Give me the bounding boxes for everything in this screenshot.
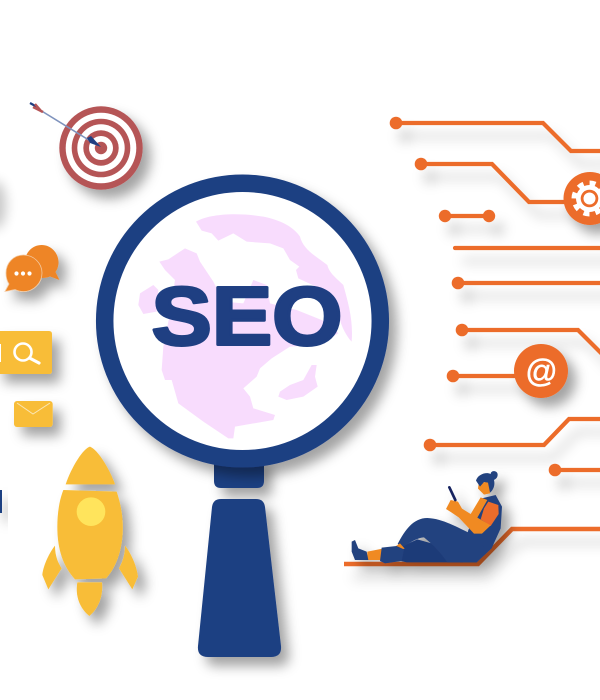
magnifying glass <box>105 183 380 657</box>
face <box>478 481 491 495</box>
circuit line 7 <box>447 370 520 382</box>
icon: rocket <box>42 447 138 616</box>
thigh <box>398 518 487 562</box>
sleeve <box>481 502 499 526</box>
arm and neck <box>446 497 491 534</box>
icon: at-sign badge: @ <box>525 353 558 389</box>
shoe right <box>380 546 404 563</box>
globe map <box>138 214 352 438</box>
target rings <box>59 106 143 190</box>
handle <box>198 458 281 657</box>
SEO label: SEO <box>152 270 342 362</box>
circuit line 1 <box>390 117 600 151</box>
circuit lines <box>344 117 600 564</box>
arrow <box>30 103 101 147</box>
circuit line 2 <box>415 158 570 202</box>
icon: target with arrow <box>30 103 143 190</box>
circuit line 9 <box>549 464 600 476</box>
circuit line 10 <box>344 529 600 564</box>
icon: mail envelope <box>14 401 53 427</box>
cropped blue element at left edge <box>0 490 2 513</box>
circuit line 6 <box>456 324 600 356</box>
lower leg <box>401 539 463 562</box>
foot left <box>352 540 368 560</box>
circuit line 8 <box>424 419 600 451</box>
circuit line 4 <box>455 246 600 250</box>
lens ring <box>105 183 380 459</box>
circuit line 3 <box>439 210 495 222</box>
phone <box>449 487 455 500</box>
hair <box>476 471 498 493</box>
torso <box>460 495 502 562</box>
circuit line 5 <box>452 277 600 289</box>
cropped element shadow at left edge <box>0 181 6 229</box>
icon: chat bubbles <box>5 245 60 292</box>
ankle <box>367 543 405 560</box>
person reclining with phone <box>352 471 502 563</box>
icon: search box <box>0 331 52 374</box>
icon: at-sign badge <box>514 344 568 398</box>
icon: gear badge <box>564 172 600 225</box>
